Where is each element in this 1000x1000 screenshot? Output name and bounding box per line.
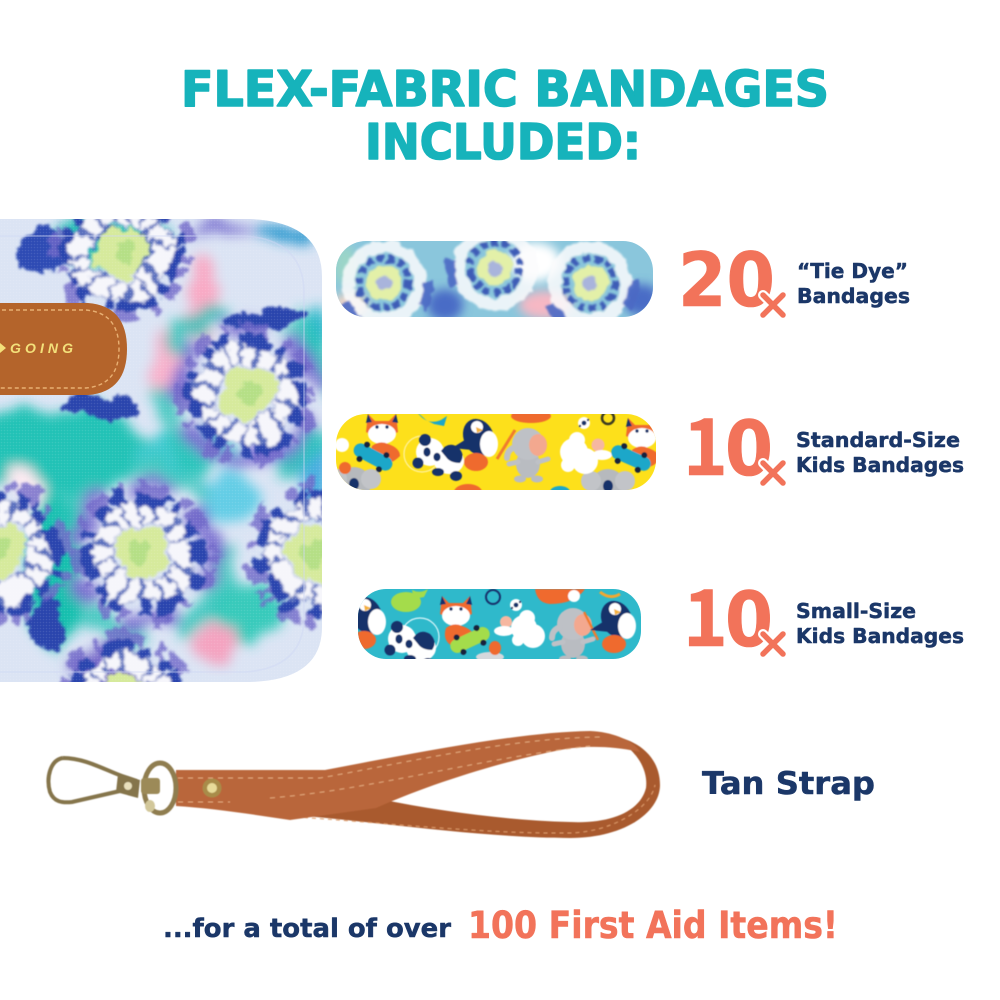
- pouch inner seam: [0, 236, 304, 672]
- tie dye spirals: [0, 219, 322, 682]
- label: small-size kids bandages: [796, 599, 964, 648]
- label: tan strap: Tan Strap: [702, 766, 875, 802]
- label: tie dye bandages: [797, 259, 910, 308]
- footer: total count: ...for a total of over: [163, 914, 451, 944]
- quantity: 10 standard: [683, 387, 783, 497]
- clasp hook: [49, 758, 137, 802]
- dark accents: [18, 225, 305, 656]
- strap upper band: [176, 731, 640, 820]
- rivet: [202, 778, 222, 798]
- tan strap with clasp: [49, 731, 660, 838]
- label: standard-size kids bandages: [796, 428, 964, 477]
- title: INCLUDED:: [365, 114, 641, 171]
- label: tie dye bandages: “Tie Dye”: [797, 259, 908, 283]
- quantity: 10 small: 0: [725, 575, 773, 664]
- footer: total count: [163, 904, 838, 947]
- footer: total count: 100 First Aid Items!: [468, 904, 838, 947]
- strap lower loop: [250, 736, 660, 838]
- leather tab with GOING label: GOING: [10, 340, 73, 356]
- quantity: 10 small: 1: [683, 558, 728, 668]
- label: standard-size kids bandages: Kids Bandages: [796, 453, 964, 477]
- quantity: 10 standard: 0: [725, 404, 773, 493]
- bandage: tie dye: [336, 241, 653, 317]
- quantity: 10 small: [683, 558, 783, 668]
- label: small-size kids bandages: Small-Size: [796, 599, 916, 623]
- bandage: standard kids yellow: [336, 414, 656, 490]
- leather tab with GOING label: [0, 303, 127, 395]
- bandage: small kids teal: [358, 589, 641, 659]
- title: FLEX-FABRIC BANDAGES: [181, 61, 829, 118]
- label: small-size kids bandages: Kids Bandages: [796, 624, 964, 648]
- fabric colour washes: [0, 219, 322, 682]
- label: tie dye bandages: Bandages: [797, 284, 910, 308]
- clasp swivel ring: [144, 763, 176, 813]
- quantity: 20 tie dye: 20: [678, 236, 775, 324]
- quantity: 10 standard: 1: [683, 387, 728, 497]
- fabric weave texture: [0, 219, 330, 689]
- label: standard-size kids bandages: Standard-Size: [796, 428, 960, 452]
- title: [181, 61, 829, 171]
- pouch photo: tie dye fabric: [0, 219, 322, 682]
